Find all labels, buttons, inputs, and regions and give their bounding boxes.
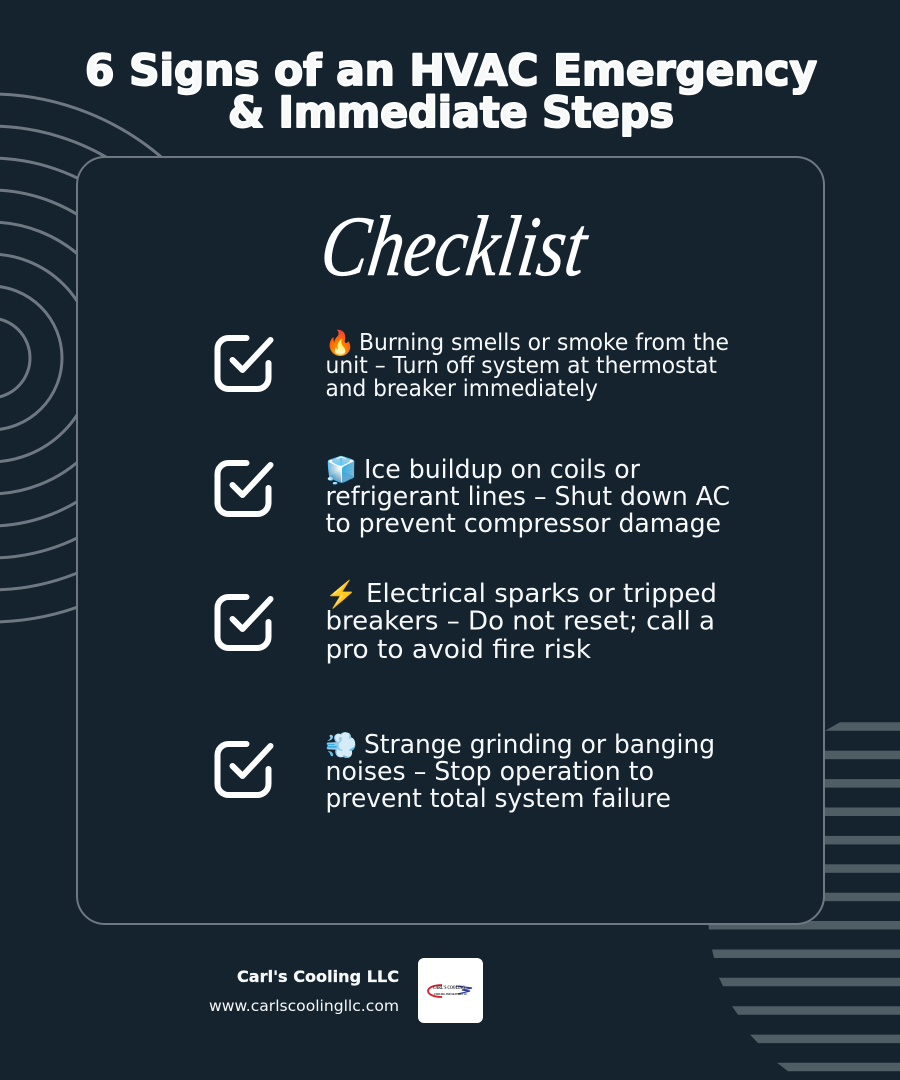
icon: checkbox xyxy=(218,597,270,648)
title: & Immediate Steps xyxy=(228,88,674,138)
checklist item 4 xyxy=(218,730,715,814)
item text: to prevent compressor damage xyxy=(326,509,721,539)
icon: fire emoji: 🔥 xyxy=(325,329,355,357)
icon: checkbox xyxy=(218,338,270,389)
item text xyxy=(326,579,717,665)
item text: Electrical sparks or tripped xyxy=(366,579,717,609)
icon: checkbox xyxy=(218,744,270,795)
title xyxy=(85,46,817,138)
item text xyxy=(326,730,715,814)
heading: Checklist: Checklist xyxy=(315,198,594,294)
footer: company name and website xyxy=(209,967,399,1015)
checklist item 1 xyxy=(218,329,729,402)
title: 6 Signs of an HVAC Emergency xyxy=(85,46,817,96)
decorative striped circle xyxy=(708,722,900,1071)
checklist item 2 xyxy=(218,455,730,539)
item text: refrigerant lines – Shut down AC xyxy=(326,482,730,512)
icon: dash emoji: 💨 xyxy=(325,731,357,761)
item text: unit – Turn off system at thermostat xyxy=(326,353,717,379)
item text: breakers – Do not reset; call a xyxy=(326,606,715,636)
item text: Burning smells or smoke from the xyxy=(359,330,729,356)
item text: pro to avoid fire risk xyxy=(326,635,591,665)
item text xyxy=(326,455,730,539)
icon: checkbox xyxy=(218,463,270,514)
item text xyxy=(326,330,729,402)
logo: CARL'S COOLING xyxy=(433,986,465,991)
item text: Ice buildup on coils or xyxy=(364,455,640,485)
icon: ice emoji: 🧊 xyxy=(325,455,357,486)
logo xyxy=(418,958,483,1023)
footer: company name and website: www.carlscoolingllc.com xyxy=(209,997,399,1015)
item text: and breaker immediately xyxy=(326,376,598,402)
item text: prevent total system failure xyxy=(326,784,671,814)
panel: checklist xyxy=(77,157,824,924)
decorative concentric rings xyxy=(0,94,254,622)
item text: Strange grinding or banging xyxy=(364,730,715,760)
item text: noises – Stop operation to xyxy=(326,757,654,787)
footer: company name and website: Carl's Cooling LLC xyxy=(237,967,399,986)
checklist item 3 xyxy=(218,579,717,665)
icon: lightning emoji: ⚡ xyxy=(325,579,357,610)
logo: COOLING AND HEATING LLC xyxy=(434,992,468,996)
